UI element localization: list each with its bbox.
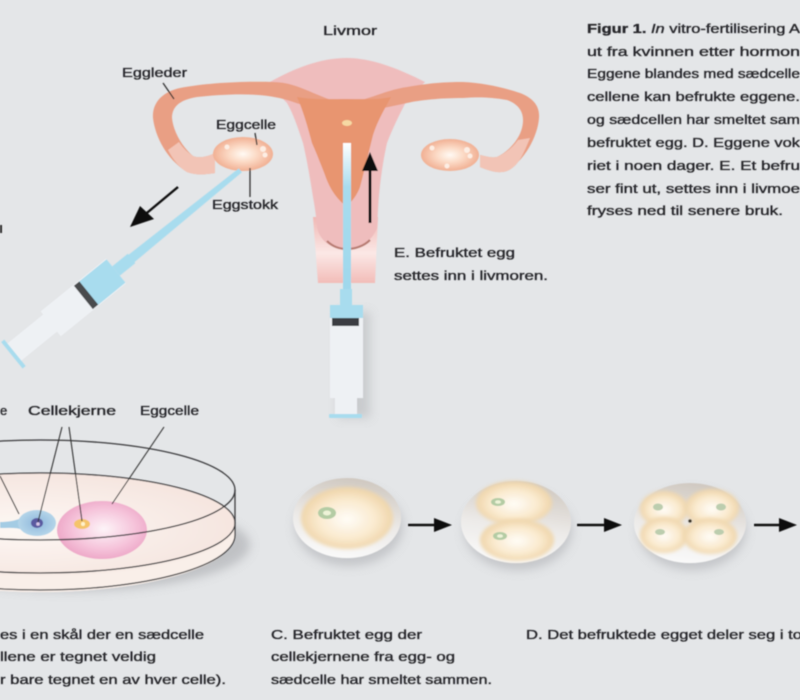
arrow: two to four cells <box>577 518 622 532</box>
barrel <box>5 259 126 365</box>
dish leader lines <box>0 427 164 522</box>
egg cell <box>57 501 147 559</box>
anatomy: uterus with tubes and ovaries <box>153 58 539 283</box>
dish base <box>0 473 235 592</box>
step C caption: cellekjernene fra egg- og <box>271 649 455 664</box>
vertical syringe <box>329 143 370 418</box>
arrow: four cells onward <box>754 518 797 532</box>
uterine cavity <box>297 97 391 206</box>
plunger foot <box>329 414 362 418</box>
right fallopian tube <box>345 82 539 172</box>
dish shadow <box>0 499 250 591</box>
cropped text fragment at left edge <box>0 225 2 233</box>
sperm cell <box>0 510 56 536</box>
step E caption <box>394 245 548 283</box>
right tube lower pale part <box>480 138 530 172</box>
step E caption: E. Befruktet egg <box>394 245 515 260</box>
barrel <box>330 305 363 417</box>
embryo: one cell <box>293 478 403 566</box>
hub <box>111 254 135 277</box>
step C caption: sædcelle har smeltet sammen. <box>271 672 492 687</box>
plunger foot <box>1 340 26 369</box>
needle <box>343 143 351 291</box>
blue fluid <box>79 259 125 305</box>
figure description text: cellene kan befrukte eggene. <box>587 89 800 104</box>
petri dish <box>0 427 250 592</box>
lighter front <box>0 526 235 592</box>
plunger band <box>332 318 359 326</box>
dark lower uterus arc <box>327 240 370 249</box>
arrow: upward into uterus <box>362 152 378 223</box>
nucleus <box>318 507 336 519</box>
caption for dish: r bare tegnet en av hver celle). <box>0 672 226 687</box>
step C caption: C. Befruktet egg der <box>271 627 423 642</box>
embryo: four cells <box>634 483 746 570</box>
figure description text <box>587 21 800 218</box>
label: Eggleder: Eggleder <box>122 65 188 80</box>
figure description text: Eggene blandes med sædcelle <box>587 66 800 81</box>
label: partial e: e <box>0 403 7 418</box>
label: Eggcelle on dish: Eggcelle <box>140 403 199 418</box>
label: Eggcelle: Eggcelle <box>216 117 276 132</box>
caption for dish: llene er tegnet veldig <box>0 649 156 664</box>
right ovary <box>421 139 479 171</box>
uterus fundus and body <box>268 58 425 249</box>
left ovary <box>213 137 273 171</box>
caption for dish <box>0 627 226 687</box>
label: Livmor: Livmor <box>323 23 378 38</box>
leader lines for anatomy labels <box>163 83 257 197</box>
figure description text: fryses ned til senere bruk. <box>587 203 783 218</box>
dish outlines <box>0 440 235 590</box>
blue fluid <box>330 305 363 318</box>
embryo: two cells <box>461 481 572 570</box>
arrow: egg extraction <box>130 187 178 227</box>
label: Eggstokk: Eggstokk <box>212 197 279 212</box>
egg cells on ovaries <box>224 144 472 168</box>
diagonal syringe <box>1 157 251 369</box>
cervix and vagina <box>313 217 378 283</box>
step C caption <box>271 627 492 687</box>
label: Cellekjerne: Cellekjerne <box>28 403 116 418</box>
figure description text: befruktet egg. D. Eggene vok <box>587 135 800 150</box>
step E caption: settes inn i livmoren. <box>394 268 548 283</box>
caption for dish: es i en skål der en sædcelle <box>0 627 204 642</box>
nuclei <box>653 504 726 535</box>
arrow: one to two cells <box>408 518 452 532</box>
fertilised egg in uterus <box>342 120 352 126</box>
left fallopian tube <box>153 82 345 174</box>
dish fluid surface <box>0 473 235 573</box>
step D caption: D. Det befruktede egget deler seg i to <box>526 627 800 642</box>
figure description text: ser fint ut, settes inn i livmoe <box>587 181 800 196</box>
figure description text: ut fra kvinnen etter hormon <box>587 44 800 59</box>
nuclei <box>491 498 505 506</box>
figure description text: riet i noen dager. E. Et befru <box>587 158 800 173</box>
plunger band <box>74 281 98 309</box>
figure description text: Figur 1. In vitro-fertilisering A <box>587 21 800 36</box>
needle <box>113 166 243 275</box>
shadow <box>338 312 370 418</box>
figure description text: og sædcellen har smeltet sam <box>587 112 800 127</box>
hub <box>340 289 352 306</box>
left tube lower pale part <box>168 142 215 174</box>
